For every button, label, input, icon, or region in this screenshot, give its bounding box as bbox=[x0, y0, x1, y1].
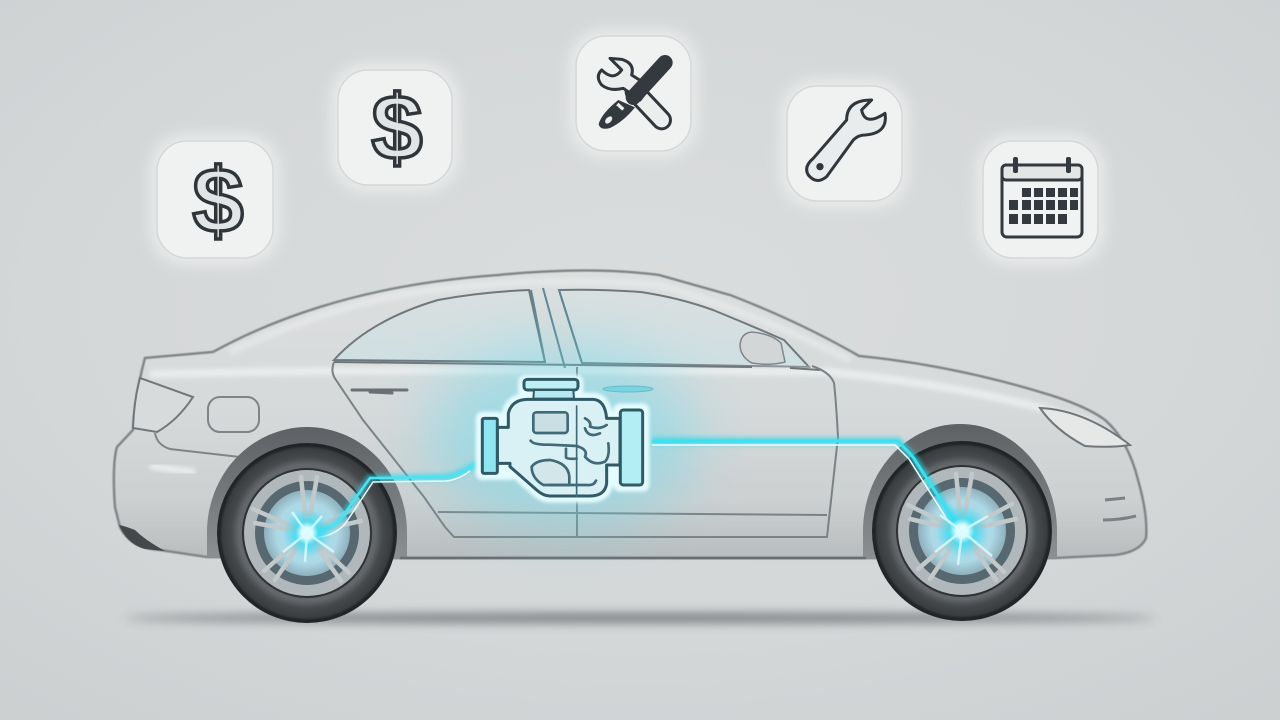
car body bbox=[114, 270, 1146, 558]
icon card: dollar left: $ bbox=[192, 150, 244, 252]
trunk lower crease bbox=[155, 433, 240, 457]
window pillar lines bbox=[531, 288, 582, 368]
icon card: dollar second bbox=[331, 63, 459, 192]
icon card: crossed wrench and screwdriver bbox=[569, 29, 698, 158]
rear bumper highlight bbox=[150, 466, 195, 472]
belt line bbox=[334, 362, 820, 370]
wrench bbox=[635, 92, 662, 120]
headlight bbox=[1040, 408, 1130, 447]
front wheel arch bbox=[863, 424, 1057, 558]
glowing line: engine to rear wheel bbox=[307, 463, 477, 538]
engine side blocks bbox=[482, 410, 643, 485]
icon card: wrench bbox=[780, 79, 909, 208]
icon card: dollar left bbox=[150, 134, 280, 265]
fuel door bbox=[208, 397, 259, 432]
screwdriver bbox=[633, 63, 665, 97]
car bbox=[114, 270, 1146, 558]
rear bumper shade bbox=[119, 525, 165, 551]
ground shadow bbox=[125, 613, 1155, 623]
engine halo bbox=[482, 382, 643, 496]
icon card: dollar second: $ bbox=[371, 77, 423, 179]
belt highlight bbox=[150, 370, 1095, 425]
engine top cap bbox=[524, 379, 578, 399]
wing mirror bbox=[740, 332, 785, 364]
rear light bbox=[133, 378, 193, 432]
rear wheel arch bbox=[207, 427, 407, 557]
engine glow bbox=[427, 348, 697, 528]
door handles bbox=[352, 390, 407, 393]
engine icon bbox=[482, 379, 643, 497]
roof inner highlight bbox=[230, 282, 850, 360]
sill line bbox=[400, 557, 866, 559]
front wheel bbox=[872, 441, 1052, 621]
icon card: calendar bbox=[976, 134, 1105, 265]
front wheel flare bbox=[935, 505, 992, 565]
rear wheel flare bbox=[283, 509, 334, 562]
side windows bbox=[334, 290, 545, 362]
engine interior details bbox=[531, 406, 609, 497]
rear wheel bbox=[217, 443, 397, 623]
front grille slot bbox=[1103, 498, 1136, 520]
door outlines bbox=[332, 362, 838, 537]
glowing line: engine to front wheel bbox=[652, 441, 960, 532]
